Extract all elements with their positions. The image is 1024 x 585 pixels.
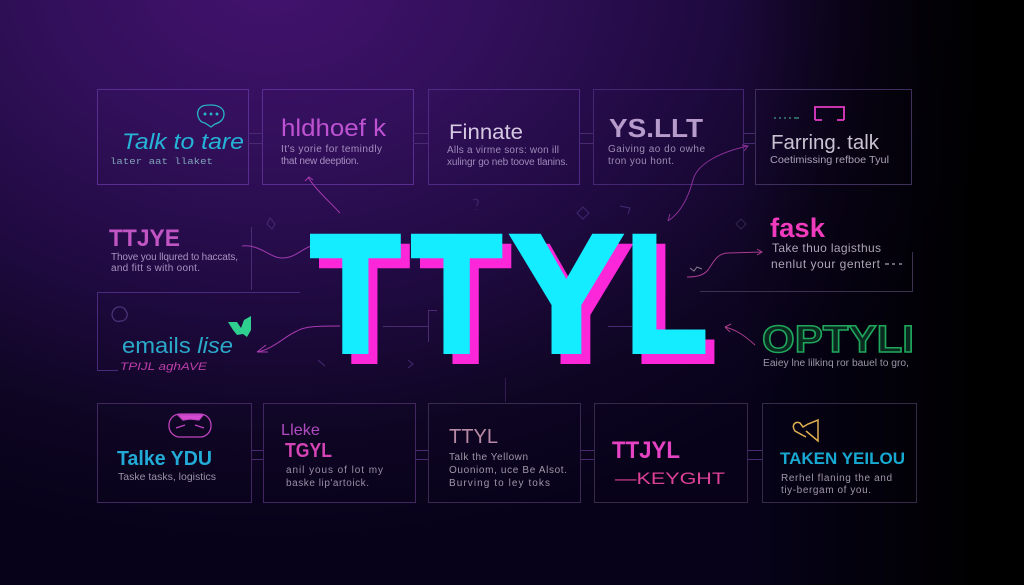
heading: finnate: Finnate — [449, 121, 523, 144]
icon: pink creature — [169, 414, 211, 437]
heading: taken yeilou: TAKEN YEILOU — [780, 449, 905, 468]
panel: ttyl keyght — [594, 404, 748, 502]
text: panel body: Take thuo lagisthus — [772, 241, 881, 255]
text: lleke: Lleke — [281, 422, 320, 439]
panel: ysblt — [594, 90, 744, 184]
heading: tgyl: TGYL — [285, 440, 332, 462]
text: later aat llaket: later aat llaket — [110, 156, 213, 167]
text: panel body: that new deeption. — [281, 156, 359, 167]
panel: ttjye — [109, 225, 238, 274]
heading: hldhoef k: hldhoef k — [281, 115, 387, 142]
icon: magenta bracket — [815, 107, 844, 120]
arrow: from ttjye — [242, 246, 311, 258]
panel: lleke tgyl — [264, 404, 416, 502]
heading: ysblt: YS.LLT — [609, 113, 703, 143]
heading: emails lise: emails lise — [122, 333, 233, 358]
text: panel body: tiy-bergam of you. — [781, 485, 871, 496]
panel: ttyl yellown — [428, 404, 580, 502]
panel: finnate — [428, 90, 580, 184]
panel: fask — [700, 213, 912, 292]
title: ttyl: Y — [511, 202, 622, 387]
arrow: to emails lise — [257, 326, 340, 352]
text: panel body: Coetimissing refboe Tyul — [770, 155, 889, 166]
heading: farring talk: Farring. talk — [771, 132, 880, 154]
icon: trailing dots — [885, 263, 902, 265]
title: ttyl shadow: T — [421, 211, 510, 397]
panel: taken yeilou — [762, 404, 916, 502]
text: panel body: xulingr go neb toove tlanins. — [447, 157, 568, 168]
text: ttyl aghave: TPIJL aghAVE — [120, 361, 208, 373]
title: ttyl — [311, 201, 707, 387]
icon: green butterfly — [228, 316, 251, 337]
panel: emails lise — [98, 292, 300, 373]
text: keyght: —KEYGHT — [615, 469, 725, 488]
panel: optyli — [762, 319, 914, 369]
icon: outline cloud — [112, 307, 127, 321]
arrow: to optyli — [725, 324, 755, 345]
text: panel body: Taske tasks, logistics — [118, 471, 216, 483]
heading: fask: fask — [770, 213, 826, 243]
text: panel body: nenlut your gentert — [771, 257, 881, 271]
text: panel body: It's yorie for temindly — [281, 144, 382, 155]
text: panel body: and fitt s with oont. — [111, 263, 200, 274]
text: panel body: Gaiving ao do owhe — [608, 144, 705, 155]
icon: yellow heart — [793, 420, 818, 441]
text: panel body: Alls a virme sors: won ill — [447, 145, 559, 156]
icon: speech bubble — [198, 105, 224, 127]
heading: talk to tare: Talk to tare — [122, 129, 244, 154]
title: ttyl shadow: L — [635, 211, 716, 396]
heading: ttyl: TTYL — [449, 426, 498, 448]
panel: hldhoef k — [262, 90, 414, 184]
text: panel body: baske lip'artoick. — [286, 478, 369, 489]
heading: ttjye: TTJYE — [109, 225, 180, 252]
text: panel body: Burving to ley toks — [449, 478, 550, 489]
text: panel body: Thove you llqured to haccats, — [111, 252, 238, 263]
title: ttyl: L — [626, 201, 707, 386]
heading: optyli: OPTYLI — [762, 319, 914, 361]
text: panel body: Eaiey lne lilkinq ror bauel to gro, — [763, 358, 909, 369]
text: panel body: Talk the Yellown — [449, 452, 528, 463]
text: panel body: anil yous of lot my — [286, 465, 383, 476]
icon: squiggle — [690, 267, 702, 271]
panel: talke you — [98, 404, 252, 502]
heading: talke you: Talke YDU — [117, 448, 212, 470]
text: panel body: Rerhel flaning the and — [781, 473, 892, 484]
text: panel body: Ouoniom, uce Be Alsot. — [449, 465, 567, 476]
arrow: to hldhoef panel — [305, 177, 340, 213]
heading: ttyl: TTJYL — [612, 437, 680, 464]
panel: talk to tare — [98, 90, 248, 184]
title: ttyl shadow — [320, 211, 716, 397]
panel: farring talk — [756, 90, 912, 184]
arrow: to fask — [687, 249, 762, 277]
text: panel body: tron you hont. — [608, 156, 674, 167]
arrow: to farring talk panel — [668, 145, 748, 221]
icon: green dots — [774, 117, 799, 119]
title: ttyl: T — [412, 201, 501, 387]
title: ttyl shadow: T — [320, 212, 409, 397]
title: ttyl shadow: Y — [520, 212, 631, 397]
title: ttyl: T — [311, 202, 400, 387]
